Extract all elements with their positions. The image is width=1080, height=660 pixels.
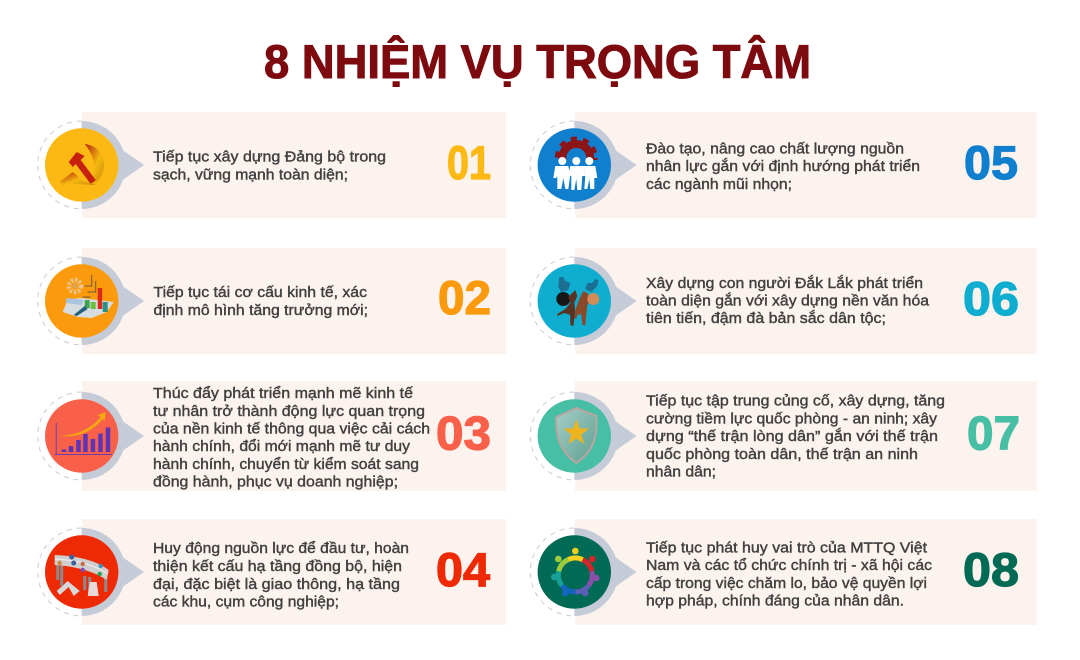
text: hành chính, chuyển từ kiểm soát sang — [153, 456, 419, 473]
text: Đào tạo, nâng cao chất lượng nguồn — [646, 140, 904, 158]
panel background — [575, 381, 1037, 491]
panel: task 02 — [38, 248, 506, 354]
text: thiện kết cấu hạ tầng đồng bộ, hiện — [153, 558, 402, 575]
panel background — [82, 112, 506, 218]
icon: people and gear badge — [530, 121, 637, 209]
text: tư nhân trở thành động lực quan trọng — [153, 403, 425, 420]
title: 8 NHIỆM VỤ TRỌNG TÂM — [264, 35, 811, 88]
text: định mô hình tăng trưởng mới; — [154, 302, 368, 319]
text — [646, 392, 945, 480]
number 04: 04 — [436, 543, 490, 596]
text: các khu, cụm công nghiệp; — [153, 594, 339, 610]
panel background — [575, 112, 1037, 218]
text: các ngành mũi nhọn; — [646, 176, 792, 193]
text: hành chính, đổi mới mạnh mẽ tư duy — [153, 438, 411, 455]
text: Tiếp tục tái cơ cấu kinh tế, xác — [154, 284, 368, 301]
text: Nam và các tổ chức chính trị - xã hội các — [646, 557, 933, 574]
icon: circle of people badge — [530, 528, 637, 616]
text: cấp trong việc chăm lo, bảo vệ quyền lợi — [646, 575, 927, 592]
text — [646, 275, 930, 327]
panel: task 04 — [38, 519, 506, 625]
text: hợp pháp, chính đáng của nhân dân. — [646, 592, 904, 610]
text — [646, 140, 920, 193]
number 07: 07 — [967, 406, 1020, 460]
text: dựng “thế trận lòng dân” gắn với thế trận — [646, 428, 938, 445]
number 06: 06 — [963, 272, 1019, 325]
text — [153, 385, 430, 490]
text — [154, 284, 368, 319]
text — [646, 540, 933, 610]
icon: economy charts badge — [38, 257, 144, 345]
text: Tiếp tục xây dựng Đảng bộ trong — [153, 148, 386, 166]
panel background — [575, 519, 1037, 625]
number 08: 08 — [963, 543, 1019, 596]
icon: hammer and sickle badge — [38, 121, 144, 209]
number 01: 01 — [447, 136, 491, 189]
panel: task 07 — [530, 381, 1037, 491]
number 05: 05 — [964, 136, 1018, 189]
icon: figures badge — [530, 257, 637, 345]
text: của nền kinh tế thông qua việc cải cách — [153, 420, 430, 438]
panel: task 01 — [38, 112, 506, 218]
text: toàn diện gắn với xây dựng nền văn hóa — [646, 292, 930, 310]
text: Xây dựng con người Đắk Lắk phát triển — [646, 275, 923, 292]
number 02: 02 — [438, 271, 491, 324]
text — [153, 540, 409, 610]
panel background — [82, 248, 506, 354]
panel background — [82, 381, 506, 491]
text: cường tiềm lực quốc phòng - an ninh; xây — [646, 410, 938, 428]
panel: task 06 — [530, 248, 1037, 354]
text: Huy động nguồn lực để đầu tư, hoàn — [153, 540, 409, 557]
text: Tiếp tục phát huy vai trò của MTTQ Việt — [646, 540, 928, 556]
text: nhân lực gắn với định hướng phát triển — [646, 158, 920, 175]
panel background — [575, 248, 1037, 354]
text: đồng hành, phục vụ doanh nghiệp; — [153, 474, 398, 490]
text: đại, đặc biệt là giao thông, hạ tầng — [153, 576, 400, 593]
panel background — [82, 519, 506, 625]
text: sạch, vững mạnh toàn diện; — [153, 166, 348, 184]
panel: task 03 — [38, 381, 506, 491]
panel: task 05 — [530, 112, 1037, 218]
text — [153, 148, 386, 184]
text: Tiếp tục tập trung củng cố, xây dựng, tăng — [646, 392, 945, 410]
text: Thúc đẩy phát triển mạnh mẽ kinh tế — [153, 385, 414, 402]
text: quốc phòng toàn dân, thế trận an ninh — [646, 446, 918, 463]
text: tiên tiến, đậm đà bản sắc dân tộc; — [646, 310, 886, 327]
number 03: 03 — [436, 406, 491, 460]
icon: highway badge — [38, 528, 144, 616]
icon: shield badge — [530, 392, 637, 480]
panel: task 08 — [530, 519, 1037, 625]
text: nhân dân; — [646, 464, 716, 480]
icon: growth chart badge — [38, 392, 144, 480]
